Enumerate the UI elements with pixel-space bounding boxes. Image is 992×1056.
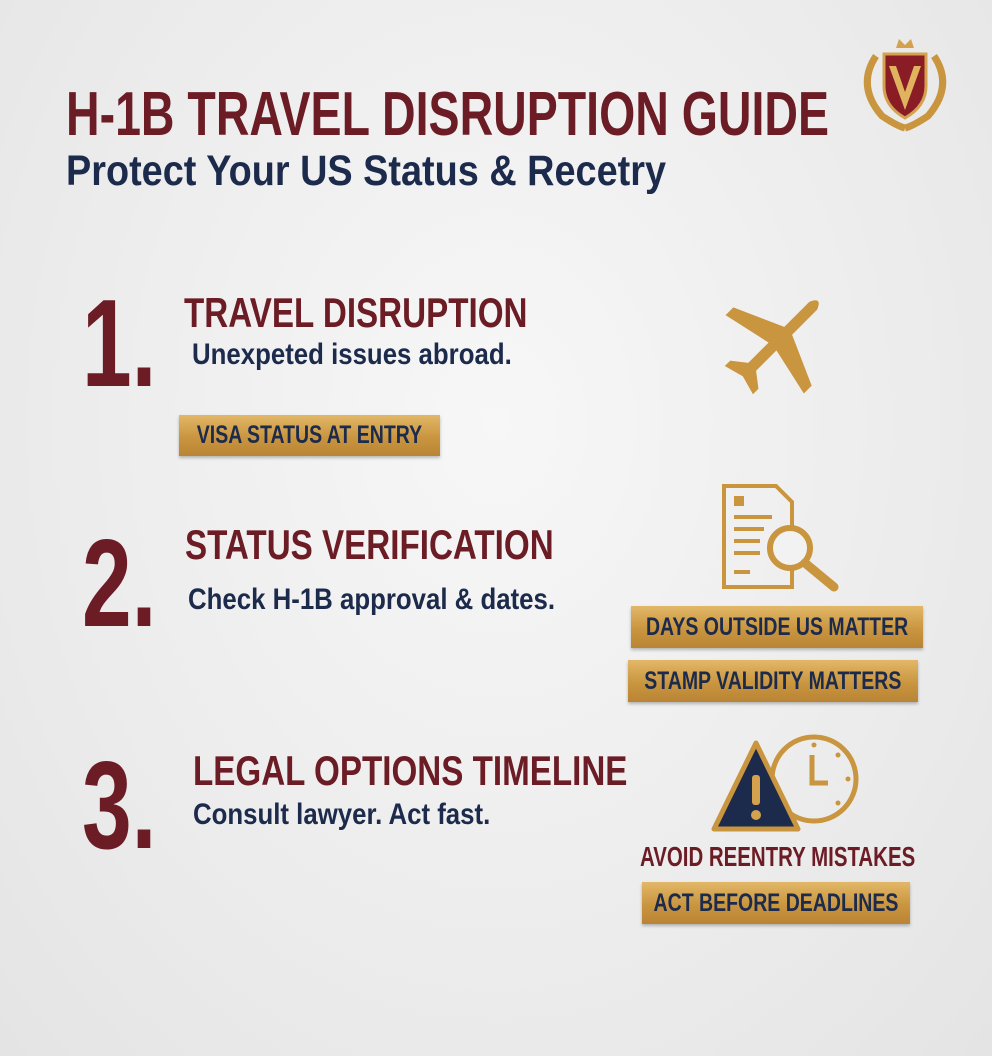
heading 3: LEGAL OPTIONS TIMELINE xyxy=(193,747,627,794)
tag: days outside: DAYS OUTSIDE US MATTER xyxy=(646,612,908,640)
tag: act before deadlines xyxy=(642,882,910,924)
tag: stamp validity: STAMP VALIDITY MATTERS xyxy=(644,666,902,694)
subtext 1: Unexpeted issues abroad. xyxy=(192,338,512,371)
tag: act before deadlines: ACT BEFORE DEADLINES xyxy=(654,888,898,916)
section 3 xyxy=(82,737,627,875)
icon: airplane xyxy=(724,300,819,394)
subtext 2: Check H-1B approval & dates. xyxy=(188,583,555,616)
tag: days outside xyxy=(631,606,923,648)
title: H-1B TRAVEL DISRUPTION GUIDE xyxy=(66,80,829,149)
warning text: AVOID REENTRY MISTAKES xyxy=(640,841,915,872)
tag: visa status xyxy=(179,415,440,456)
number 1: 1. xyxy=(82,275,156,413)
logo xyxy=(864,39,946,132)
subtitle: Protect Your US Status & Recetry xyxy=(66,147,666,195)
number 3: 3. xyxy=(82,737,156,875)
number 2: 2. xyxy=(82,515,156,653)
tag: stamp validity xyxy=(628,660,918,702)
heading 2: STATUS VERIFICATION xyxy=(185,521,554,568)
heading 1: TRAVEL DISRUPTION xyxy=(184,289,528,336)
tag: visa status: VISA STATUS AT ENTRY xyxy=(197,421,422,449)
section 1 xyxy=(82,275,528,413)
icon: document search xyxy=(722,484,838,592)
subtext 3: Consult lawyer. Act fast. xyxy=(193,798,490,831)
section 2 xyxy=(82,515,555,653)
icon: warning clock xyxy=(712,734,858,832)
